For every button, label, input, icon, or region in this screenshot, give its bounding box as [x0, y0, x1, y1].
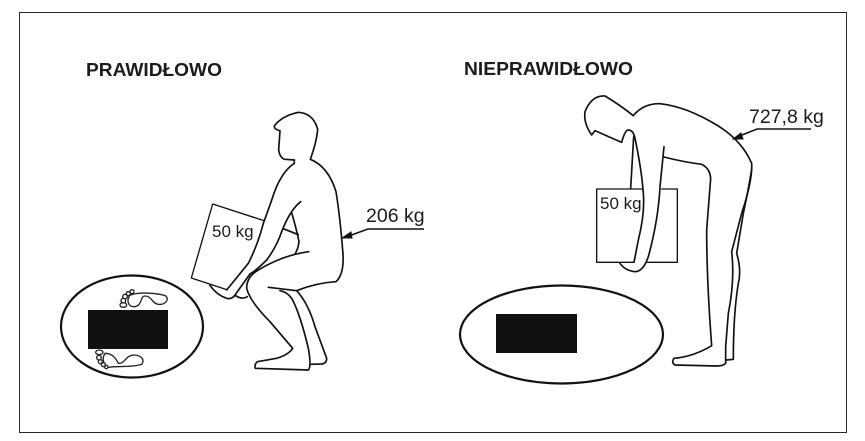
- back outline and front leg: [633, 104, 752, 366]
- label: 50 kg correct: 50 kg: [212, 222, 254, 241]
- heading: incorrect: NIEPRAWIDŁOWO: [464, 59, 633, 79]
- rear leg: [727, 169, 752, 360]
- hand under box: [210, 274, 250, 299]
- body outline: [268, 112, 343, 291]
- ellipse: correct foot position: [61, 276, 203, 378]
- box 50 kg: [191, 204, 264, 290]
- heading: correct: PRAWIDŁOWO: [86, 60, 222, 80]
- rear leg: [297, 291, 327, 364]
- head and face and arm: [585, 96, 644, 262]
- feet: [96, 290, 167, 369]
- black box from above: [88, 310, 168, 349]
- label: 727,8 kg with arrow: 727,8 kg: [749, 106, 824, 128]
- black box from above: [496, 314, 577, 353]
- ellipse: incorrect foot position: [460, 286, 663, 384]
- thigh and front leg: [247, 252, 310, 370]
- panel: incorrect lift figure: [585, 96, 752, 366]
- inner arm: [250, 202, 301, 274]
- far arm: [631, 137, 634, 188]
- box 50 kg: [597, 189, 677, 262]
- label: 50 kg incorrect: 50 kg: [600, 194, 642, 213]
- panel: correct lift figure: [191, 112, 343, 370]
- lower hand detail: [235, 295, 247, 298]
- outer arm: [227, 160, 294, 290]
- top foot: [120, 290, 167, 307]
- label: 206 kg with arrow: 206 kg: [366, 205, 425, 227]
- label: 727,8 kg with arrow: [733, 106, 824, 139]
- near arm: [620, 147, 664, 272]
- torso inner lines: [292, 213, 299, 254]
- label: 206 kg with arrow: [342, 205, 425, 238]
- bottom foot: [96, 350, 143, 369]
